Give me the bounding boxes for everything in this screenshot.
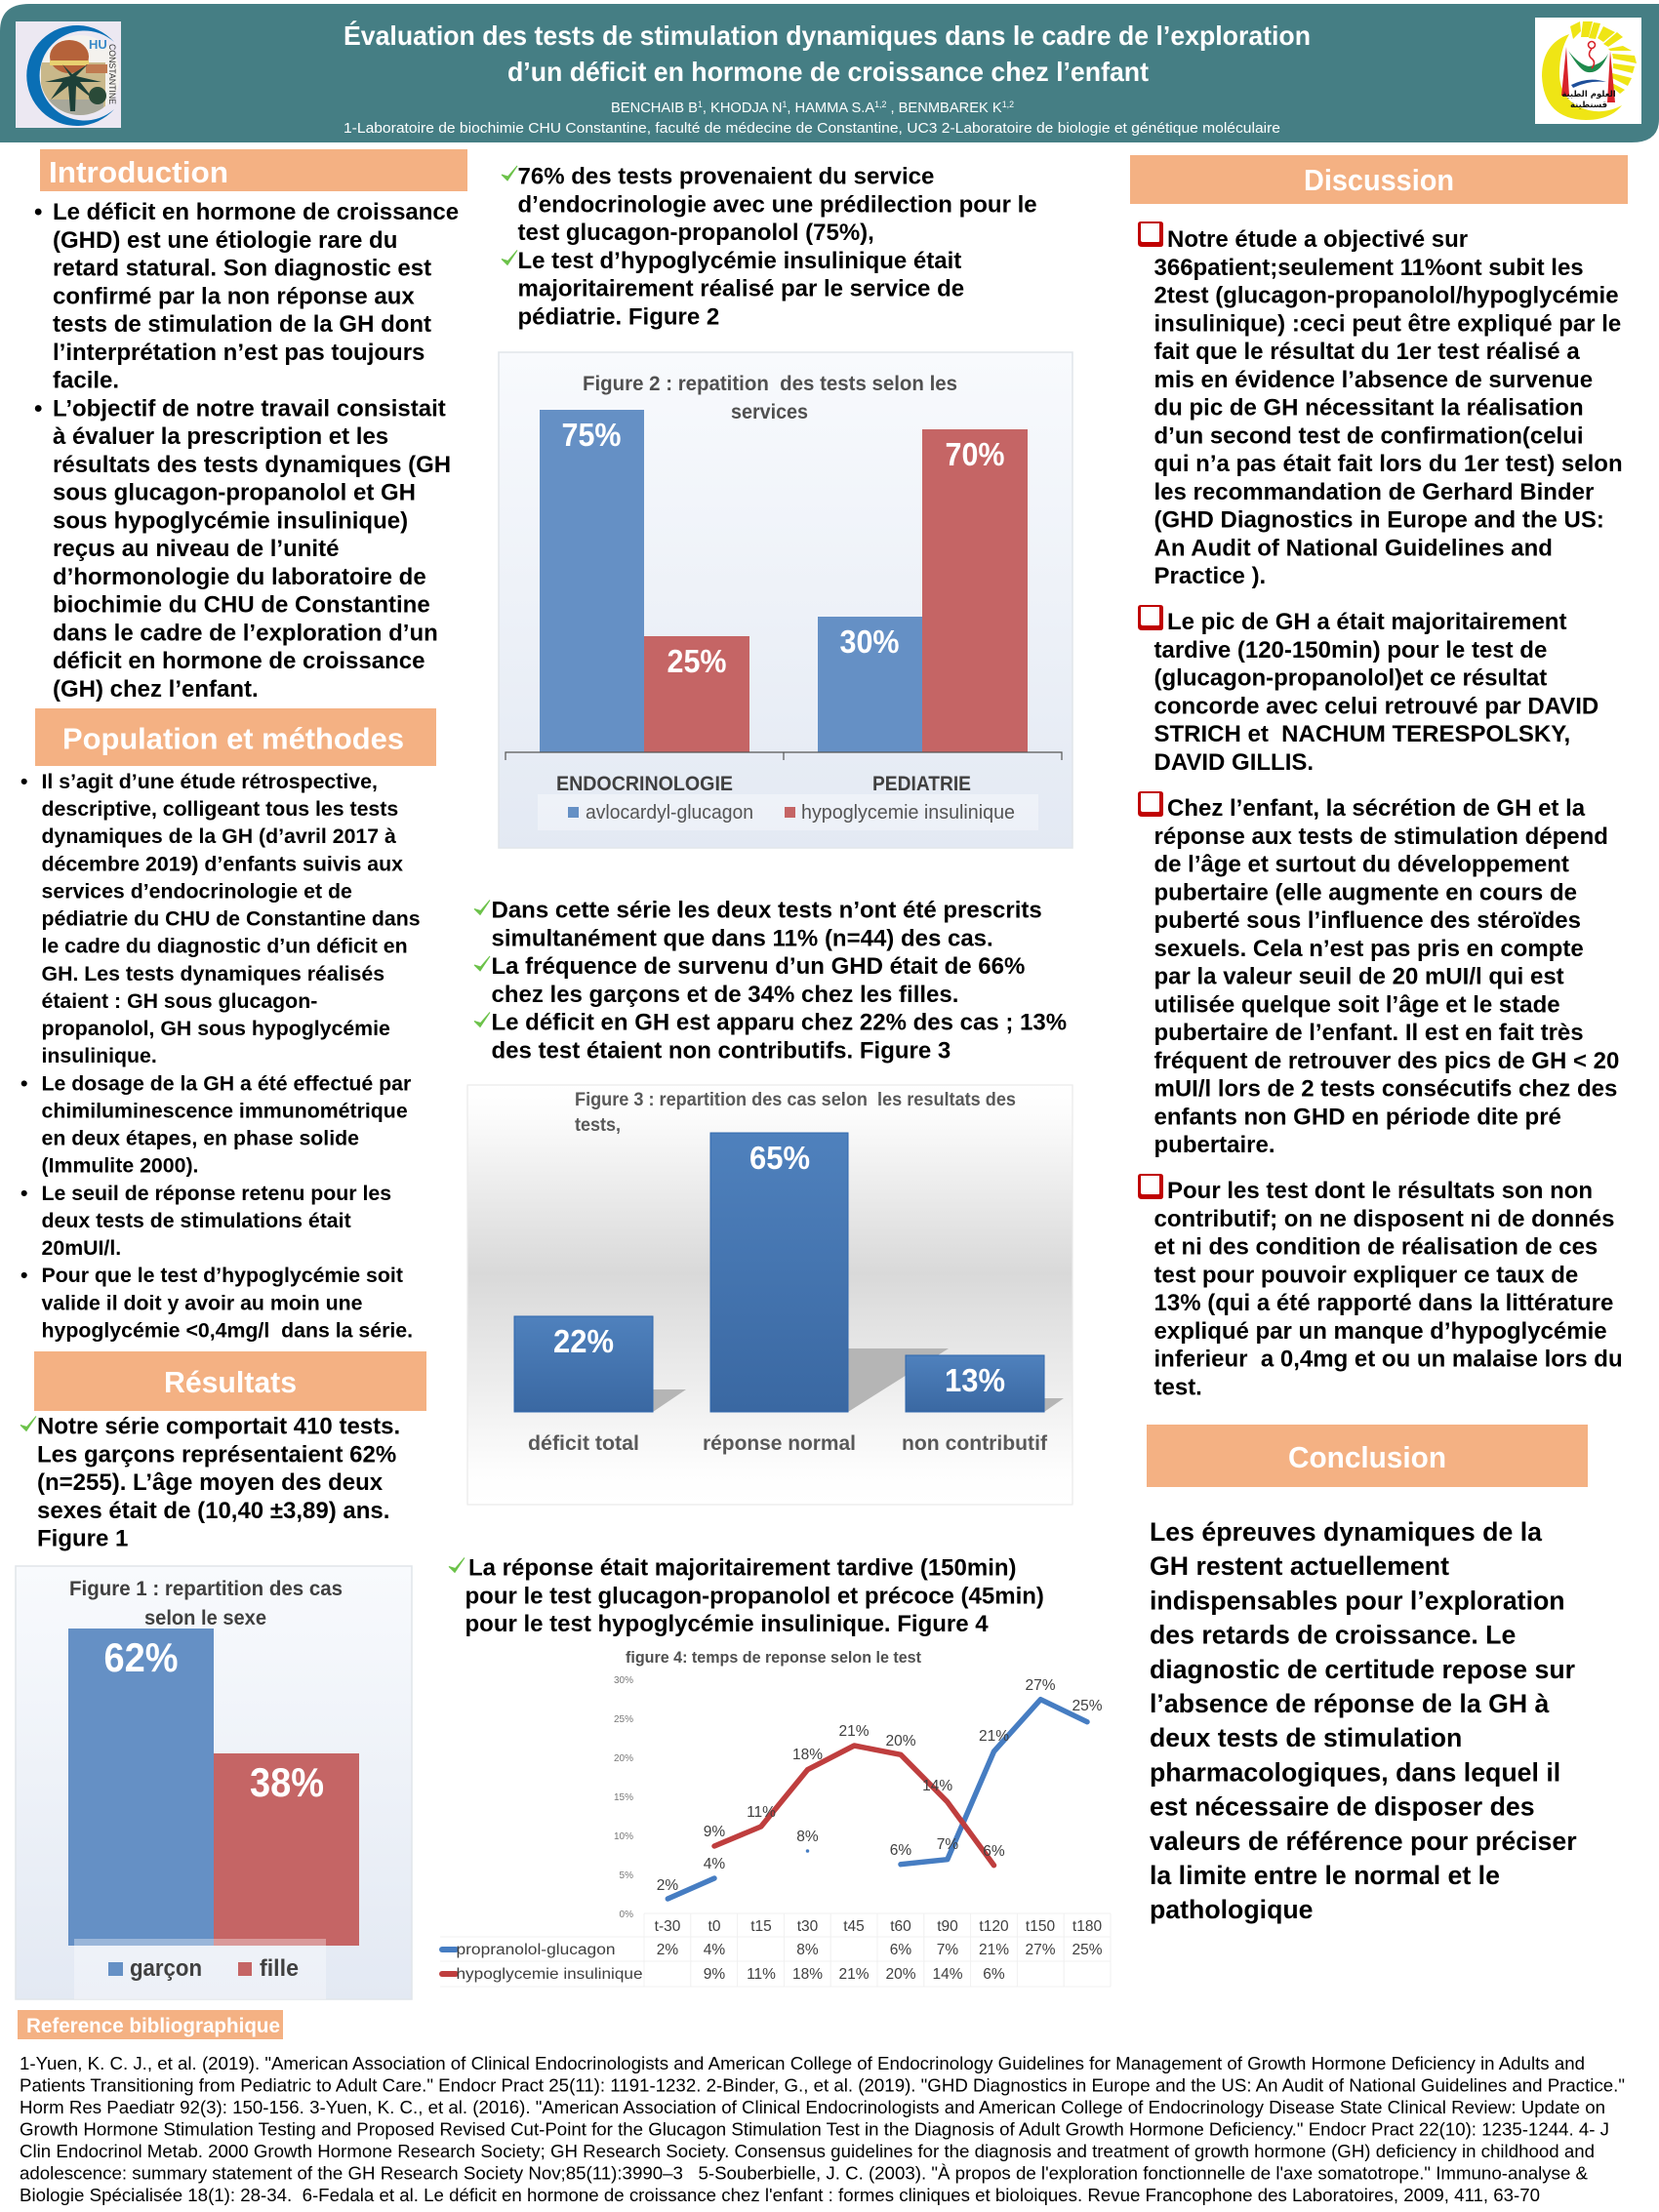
- affiliations: 1-Laboratoire de biochimie CHU Constantine, faculté de médecine de Constantine, UC3 2-Laboratoire de biologie et génétique moléculaire: [344, 120, 1280, 137]
- legend: [74, 1939, 326, 1999]
- chart: Figure 1: selon le sexe: [144, 1607, 266, 1629]
- methods text: (Immulite 2000).: [41, 1154, 198, 1178]
- discussion paragraph 3: [1138, 791, 1619, 1158]
- conclusion text: GH restent actuellement: [1150, 1551, 1449, 1581]
- table row: propranolol-glucagon: 2%: [657, 1942, 678, 1958]
- text: services: test glucagon-propanolol (75%),: [517, 220, 874, 246]
- table header: t-30: [655, 1918, 681, 1935]
- table row: hypoglycemie insulinique: 20%: [885, 1966, 916, 1983]
- category labels: réponse normal: [703, 1432, 856, 1455]
- table row: propranolol-glucagon: 6%: [890, 1942, 911, 1958]
- table header: t45: [843, 1918, 865, 1935]
- data labels: 11%: [747, 1804, 776, 1821]
- chart: Figure 2: [499, 352, 1072, 848]
- bar: pediatrie 30%: [818, 617, 922, 752]
- line: hypoglycemie insulinique: [714, 1746, 993, 1866]
- y axis labels: 15%: [614, 1792, 633, 1803]
- discussion paragraph 4: Pour les test dont le résultats son non: [1167, 1178, 1593, 1204]
- text: series: simultanément que dans 11% (n=44) des cas.: [492, 925, 993, 951]
- discussion paragraph 1: insulinique) :ceci peut être expliqué par le: [1153, 310, 1621, 337]
- discussion paragraph 4: et ni des condition de réalisation de ces: [1153, 1233, 1598, 1261]
- text: services: majoritairement réalisé par le service de: [517, 275, 964, 302]
- table row: propranolol-glucagon: 25%: [1072, 1942, 1103, 1958]
- references text: [20, 2053, 1625, 2205]
- data labels: 7%: [937, 1836, 958, 1853]
- references text: Biologie Spécialisée 18(1): 28-34. 6-Fedala et al. Le déficit en hormone de croissance chez l'enfant : formes cliniques et bioloiques. Revue Francophone des Laboratoires, 2009, 411, 63-70: [20, 2185, 1540, 2205]
- introduction text: biochimie du CHU de Constantine: [53, 591, 430, 619]
- discussion paragraph 1: Notre étude a objectivé sur: [1167, 226, 1468, 253]
- heading: Population et méthodes: [35, 708, 436, 766]
- table row: propranolol-glucagon: 27%: [1025, 1942, 1056, 1958]
- authors: , KHODJA N: [703, 100, 782, 116]
- text: services: pédiatrie. Figure 2: [517, 303, 719, 330]
- logo: CHU Constantine: [16, 21, 127, 128]
- discussion paragraph 1: An Audit of National Guidelines and: [1153, 535, 1553, 561]
- results text: [20, 1413, 400, 1551]
- methods text: le cadre du diagnostic d’un déficit en: [41, 935, 408, 958]
- table row: hypoglycemie insulinique: hypoglycemie insulinique: [457, 1966, 642, 1983]
- bar: endocrinologie 25%: [644, 636, 749, 752]
- table header: t30: [797, 1918, 819, 1935]
- discussion paragraph 1: Practice ).: [1153, 563, 1266, 589]
- methods text: Le dosage de la GH a été effectué par: [41, 1071, 411, 1095]
- text: series: [474, 898, 1067, 1064]
- discussion paragraph 1: du pic de GH nécessitant la réalisation: [1153, 394, 1584, 422]
- results text: Notre série comportait 410 tests.: [37, 1413, 400, 1440]
- discussion paragraph 3: pubertaire.: [1153, 1132, 1275, 1158]
- introduction text: dans le cadre de l’exploration d’un: [53, 620, 438, 646]
- introduction text: confirmé par la non réponse aux: [53, 283, 415, 309]
- table row: propranolol-glucagon: 7%: [937, 1942, 958, 1958]
- discussion paragraph 2: concorde avec celui retrouvé par DAVID: [1153, 693, 1598, 719]
- text: response timing: pour le test hypoglycémie insulinique. Figure 4: [465, 1611, 989, 1637]
- discussion paragraph 2: DAVID GILLIS.: [1153, 749, 1314, 776]
- methods text: •: [20, 770, 27, 793]
- discussion paragraph 4: [1138, 1174, 1623, 1400]
- references text: Clin Endocrinol Metab. 2000 Growth Hormone Research Society; GH Research Society. Consensus guidelines for the diagnosis and treatment of growth hormone (GH) deficiency in childhood and: [20, 2141, 1595, 2161]
- introduction text: d’hormonologie du laboratoire de: [53, 564, 426, 590]
- table header: t180: [1072, 1918, 1102, 1935]
- authors: 1: [698, 100, 703, 109]
- data labels: 25%: [1072, 1698, 1103, 1714]
- category labels: [556, 773, 971, 795]
- table row: propranolol-glucagon: 21%: [979, 1942, 1009, 1958]
- category labels: non contributif: [902, 1432, 1048, 1455]
- chart: Figure 3: Figure 3 : repartition des cas selon les resultats des: [575, 1089, 1016, 1110]
- references text: adolescence: summary statement of the GH Research Society Nov;85(11):3990–3 5-Souberbielle, J. C. (2003). "À propos de l'exploration fonctionnelle de l'axe somatotrope." Immuno-analyse &: [20, 2162, 1589, 2184]
- methods text: chimiluminescence immunométrique: [41, 1099, 408, 1122]
- icon: checkbox: [1138, 1174, 1163, 1199]
- conclusion text: des retards de croissance. Le: [1150, 1621, 1516, 1650]
- y axis labels: 20%: [614, 1753, 633, 1764]
- category labels: déficit total: [528, 1432, 639, 1455]
- discussion paragraph 3: de l’âge et surtout du développement: [1153, 851, 1569, 878]
- introduction text: résultats des tests dynamiques (GH: [53, 452, 451, 478]
- title: d’un déficit en hormone de croissance chez l’enfant: [507, 57, 1149, 87]
- conclusion text: indispensables pour l’exploration: [1150, 1586, 1565, 1615]
- conclusion text: l’absence de réponse de la GH à: [1150, 1689, 1550, 1718]
- table row: hypoglycemie insulinique: 14%: [932, 1966, 963, 1983]
- conclusion text: deux tests de stimulation: [1150, 1723, 1462, 1752]
- discussion paragraph 4: expliqué par un manque d’hypoglycémie: [1153, 1318, 1607, 1345]
- icon: checkbox: [1138, 791, 1163, 817]
- discussion paragraph 4: test pour pouvoir expliquer ce taux de: [1153, 1262, 1578, 1288]
- discussion paragraph 1: mis en évidence l’absence de survenue: [1153, 367, 1593, 393]
- data labels: 8%: [796, 1829, 819, 1845]
- methods text: valide il doit y avoir au moin une: [41, 1291, 363, 1314]
- discussion paragraph 1: qui n’a pas était fait lors du 1er test) selon: [1153, 451, 1623, 477]
- table row: hypoglycemie insulinique: 6%: [983, 1966, 1005, 1983]
- bar: endocrinologie 25%: 25%: [668, 643, 726, 679]
- y axis labels: [614, 1675, 633, 1920]
- discussion paragraph 1: 366patient;seulement 11%ont subit les: [1153, 255, 1584, 281]
- methods text: propanolol, GH sous hypoglycémie: [41, 1017, 390, 1040]
- legend: garçon: [130, 1955, 202, 1982]
- methods text: •: [20, 1264, 27, 1287]
- table row: propranolol-glucagon: propranolol-glucagon: [457, 1942, 615, 1958]
- bar: garçon 62%: [68, 1629, 214, 1946]
- results text: Les garçons représentaient 62%: [37, 1441, 396, 1468]
- methods text: décembre 2019) d’enfants suivis aux: [41, 852, 403, 875]
- table header: t90: [937, 1918, 958, 1935]
- introduction text: reçus au niveau de l’unité: [53, 536, 339, 562]
- y axis labels: 10%: [614, 1831, 633, 1842]
- bar: garçon 62%: 62%: [103, 1634, 178, 1680]
- table row: propranolol-glucagon: [442, 1942, 1103, 1958]
- category labels: PEDIATRIE: [872, 773, 971, 795]
- bar: déficit total 22%: [514, 1316, 653, 1412]
- category labels: [528, 1432, 1048, 1455]
- heading: Reference bibliographique: Reference bibliographique: [26, 2015, 280, 2037]
- methods text: Le seuil de réponse retenu pour les: [41, 1182, 391, 1205]
- text: services: d’endocrinologie avec une prédilection pour le: [517, 191, 1037, 218]
- logo: CHU Constantine: CONSTANTINE: [107, 44, 117, 104]
- results text: sexes était de (10,40 ±3,89) ans.: [37, 1498, 389, 1524]
- references text: Growth Hormone Stimulation Testing and Proposed Revised Cut-Point for the Glucagon Stimulation Test in the Diagnosis of Adult Growth Hormone Deficiency." Endocr Pract 22(10): 1235-1244. 4- J: [20, 2119, 1609, 2139]
- heading: Conclusion: [1147, 1425, 1588, 1487]
- methods text: •: [20, 1182, 27, 1205]
- bar: pediatrie 30%: 30%: [839, 623, 900, 660]
- heading: Résultats: Résultats: [164, 1365, 297, 1399]
- data labels: 20%: [885, 1733, 916, 1749]
- references text: Patients Transitioning from Pediatric to Adult Care." Endocr Pract 25(11): 1191-1232. 2-Binder, G., et al. (2019). "GHD Diagnostics in Europe and the US: An Audit of National Guidelines and Practice.": [20, 2074, 1625, 2096]
- bar: fille 38%: 38%: [250, 1759, 324, 1805]
- discussion paragraph 3: Chez l’enfant, la sécrétion de GH et la: [1167, 795, 1586, 822]
- legend: avlocardyl-glucagon: [586, 802, 753, 824]
- chart: Figure 2: services: [731, 401, 808, 423]
- text: series: Dans cette série les deux tests n’ont été prescrits: [492, 898, 1042, 923]
- data labels: 9%: [704, 1824, 725, 1840]
- introduction text: (GHD) est une étiologie rare du: [53, 227, 397, 254]
- data labels: 27%: [1025, 1677, 1056, 1694]
- logo: CHU Constantine: HU: [89, 37, 107, 52]
- bar: réponse normal 65%: [710, 1133, 848, 1412]
- heading: Discussion: Discussion: [1304, 163, 1454, 197]
- references text: 1-Yuen, K. C. J., et al. (2019). "American Association of Clinical Endocrinologists and American College of Endocrinology Guidelines for Management of Growth Hormone Deficiency in Adults and: [20, 2053, 1585, 2073]
- introduction text: déficit en hormone de croissance: [53, 648, 425, 674]
- introduction text: •: [34, 199, 42, 225]
- heading: Conclusion: Conclusion: [1288, 1440, 1446, 1474]
- text: series: des test étaient non contributifs. Figure 3: [492, 1037, 951, 1064]
- introduction text: [34, 199, 459, 703]
- methods text: dynamiques de la GH (d’avril 2017 à: [41, 824, 396, 848]
- icon: checkbox: [1138, 221, 1163, 247]
- table row: hypoglycemie insulinique: 18%: [792, 1966, 823, 1983]
- table row: hypoglycemie insulinique: 21%: [838, 1966, 870, 1983]
- authors: BENCHAIB B: [611, 100, 700, 116]
- chart: Figure 1: [16, 1566, 412, 1999]
- table header: t0: [708, 1918, 721, 1935]
- icon: checkbox: [1138, 605, 1163, 630]
- introduction text: facile.: [53, 367, 119, 394]
- y axis labels: 0%: [620, 1910, 633, 1920]
- table header: t120: [979, 1918, 1009, 1935]
- text: response timing: La réponse était majoritairement tardive (150min): [468, 1555, 1017, 1581]
- results text: Figure 1: [37, 1526, 128, 1551]
- introduction text: Le déficit en hormone de croissance: [53, 199, 459, 225]
- discussion paragraph 3: sexuels. Cela n’est pas pris en compte: [1153, 936, 1584, 962]
- references text: Horm Res Paediatr 92(3): 150-156. 3-Yuen, K. C., et al. (2016). "American Association of Clinical Endocrinologists and American College of Endocrinology Disease State Clinical Review: Update on: [20, 2097, 1605, 2117]
- conclusion text: valeurs de référence pour préciser: [1150, 1827, 1577, 1856]
- bar: endocrinologie 75%: [540, 410, 644, 752]
- discussion paragraph 3: puberté sous l’influence des stéroïdes: [1153, 907, 1581, 934]
- methods text: descriptive, colligeant tous les tests: [41, 797, 398, 821]
- discussion paragraph 2: tardive (120-150min) pour le test de: [1153, 637, 1547, 664]
- discussion paragraph 1: [1138, 221, 1623, 589]
- authors: 1: [782, 100, 787, 109]
- text: services: 76% des tests provenaient du service: [517, 164, 934, 189]
- discussion paragraph 1: d’un second test de confirmation(celui: [1153, 422, 1584, 449]
- text: response timing: [449, 1555, 1044, 1637]
- methods text: deux tests de stimulations était: [41, 1209, 351, 1232]
- methods text: hypoglycémie <0,4mg/l dans la série.: [41, 1318, 413, 1342]
- legend: fille: [260, 1955, 299, 1982]
- table row: hypoglycemie insulinique: 11%: [747, 1966, 776, 1983]
- methods text: en deux étapes, en phase solide: [41, 1127, 359, 1150]
- discussion paragraph 4: inferieur a 0,4mg et ou un malaise lors du: [1153, 1347, 1623, 1372]
- introduction text: •: [34, 395, 42, 422]
- title: Évaluation des tests de stimulation dynamiques dans le cadre de l’exploration: [344, 20, 1311, 51]
- methods text: [20, 770, 421, 1342]
- authors: 1,2: [874, 100, 886, 109]
- legend: [538, 794, 1038, 830]
- table header: t15: [750, 1918, 772, 1935]
- data labels: 21%: [838, 1723, 870, 1740]
- heading: Introduction: [40, 149, 467, 191]
- discussion paragraph 3: mUI/l lors de 2 tests consécutifs chez des: [1153, 1075, 1617, 1103]
- data labels: 6%: [890, 1842, 911, 1859]
- introduction text: (GH) chez l’enfant.: [53, 676, 259, 703]
- authors: 1,2: [1002, 100, 1014, 109]
- data labels: 6%: [983, 1843, 1005, 1860]
- logo: medical sciences: قسنطينة: [1570, 101, 1607, 110]
- discussion paragraph 3: réponse aux tests de stimulation dépend: [1153, 824, 1608, 850]
- bar: non contributif 13%: 13%: [945, 1362, 1005, 1398]
- logo: medical sciences: العلوم الطبية: [1561, 90, 1616, 100]
- text: response timing: pour le test glucagon-propanolol et précoce (45min): [465, 1583, 1044, 1609]
- text: series: chez les garçons et de 34% chez les filles.: [492, 982, 958, 1008]
- discussion paragraph 1: les recommandation de Gerhard Binder: [1153, 479, 1594, 505]
- table header: t150: [1026, 1918, 1055, 1935]
- text: services: [502, 164, 1037, 330]
- header banner: [0, 4, 1659, 142]
- chart: Figure 3: [467, 1085, 1072, 1505]
- discussion paragraph 3: pubertaire (elle augmente en cours de: [1153, 879, 1577, 905]
- introduction text: sous glucagon-propanolol et GH: [53, 480, 416, 505]
- discussion paragraph 1: fait que le résultat du 1er test réalisé a: [1153, 339, 1580, 365]
- heading: Introduction: Introduction: [49, 155, 228, 189]
- introduction text: à évaluer la prescription et les: [53, 423, 388, 450]
- methods text: services d’endocrinologie et de: [41, 879, 352, 903]
- bar: fille 38%: [214, 1753, 359, 1946]
- chart: Figure 4: [440, 1648, 1111, 1987]
- methods text: 20mUI/l.: [41, 1236, 121, 1260]
- methods text: GH. Les tests dynamiques réalisés: [41, 962, 384, 985]
- data labels: [657, 1677, 1103, 1894]
- discussion paragraph 3: par la valeur seuil de 20 mUI/l qui est: [1153, 964, 1564, 989]
- conclusion text: Les épreuves dynamiques de la: [1150, 1517, 1543, 1547]
- bar: pediatrie 70%: 70%: [945, 436, 1005, 472]
- data labels: 14%: [922, 1778, 952, 1794]
- discussion paragraph 2: STRICH et NACHUM TERESPOLSKY,: [1153, 721, 1570, 747]
- results text: (n=255). L’âge moyen des deux: [37, 1469, 384, 1496]
- authors: , BENMBAREK K: [886, 100, 1002, 116]
- category labels: ENDOCRINOLOGIE: [556, 773, 733, 795]
- discussion paragraph 3: enfants non GHD en période dite pré: [1153, 1104, 1561, 1130]
- conclusion text: pharmacologiques, dans lequel il: [1150, 1757, 1560, 1787]
- data labels: 4%: [704, 1856, 725, 1872]
- text: services: Le test d’hypoglycémie insulinique était: [517, 248, 961, 274]
- discussion paragraph 4: contributif; on ne disposent ni de donnés: [1153, 1206, 1614, 1232]
- introduction text: L’objectif de notre travail consistait: [53, 395, 446, 422]
- heading: Résultats: [34, 1351, 426, 1411]
- data labels: 18%: [792, 1747, 823, 1763]
- chart: Figure 2: Figure 2 : repatition des tests selon les: [583, 373, 957, 395]
- table row: propranolol-glucagon: 8%: [796, 1942, 819, 1958]
- discussion paragraph 2: Le pic de GH a était majoritairement: [1167, 609, 1566, 635]
- conclusion text: la limite entre le normal et le: [1150, 1861, 1500, 1890]
- conclusion text: pathologique: [1150, 1895, 1314, 1924]
- conclusion text: diagnostic de certitude repose sur: [1150, 1655, 1575, 1684]
- methods text: Il s’agit d’une étude rétrospective,: [41, 770, 378, 793]
- discussion paragraph 2: (glucagon-propanolol)et ce résultat: [1153, 665, 1547, 691]
- discussion paragraph 4: 13% (qui a été rapporté dans la littérature: [1153, 1290, 1613, 1316]
- data labels: 21%: [979, 1728, 1009, 1745]
- introduction text: sous hypoglycémie insulinique): [53, 507, 408, 534]
- bar: endocrinologie 75%: 75%: [562, 417, 621, 453]
- discussion paragraph 4: test.: [1153, 1374, 1202, 1400]
- heading: Discussion: [1130, 155, 1628, 204]
- y axis labels: 30%: [614, 1675, 633, 1686]
- table row: hypoglycemie insulinique: [442, 1966, 1005, 1983]
- bar: déficit total 22%: 22%: [553, 1323, 614, 1359]
- introduction text: retard statural. Son diagnostic est: [53, 256, 431, 281]
- bar: réponse normal 65%: 65%: [749, 1140, 810, 1176]
- bar: pediatrie 70%: [922, 429, 1028, 752]
- title: [344, 20, 1311, 87]
- table row: hypoglycemie insulinique: 9%: [704, 1966, 725, 1983]
- methods text: •: [20, 1071, 27, 1095]
- legend: hypoglycemie insulinique: [801, 802, 1015, 824]
- introduction text: tests de stimulation de la GH dont: [53, 311, 431, 338]
- y axis labels: 5%: [620, 1870, 633, 1881]
- data labels: 2%: [657, 1877, 678, 1894]
- methods text: insulinique.: [41, 1044, 157, 1067]
- introduction text: l’interprétation n’est pas toujours: [53, 340, 425, 366]
- methods text: étaient : GH sous glucagon-: [41, 989, 317, 1013]
- table header: t60: [890, 1918, 911, 1935]
- methods text: pédiatrie du CHU de Constantine dans: [41, 907, 421, 931]
- table row: propranolol-glucagon: 4%: [704, 1942, 725, 1958]
- logo: medical sciences: [1535, 18, 1641, 124]
- methods text: Pour que le test d’hypoglycémie soit: [41, 1264, 403, 1287]
- chart: Figure 4: figure 4: temps de reponse selon le test: [626, 1648, 921, 1667]
- bar: non contributif 13%: [906, 1355, 1044, 1412]
- authors: , HAMMA S.A: [787, 100, 874, 116]
- discussion paragraph 3: fréquent de retrouver des pics de GH < 20: [1153, 1048, 1619, 1074]
- chart: Figure 3: tests,: [575, 1114, 621, 1136]
- discussion paragraph 1: (GHD Diagnostics in Europe and the US:: [1153, 507, 1604, 533]
- chart: Figure 1: Figure 1 : repartition des cas: [69, 1578, 343, 1600]
- discussion paragraph 1: 2test (glucagon-propanolol/hypoglycémie: [1153, 283, 1619, 308]
- y axis labels: 25%: [614, 1714, 633, 1725]
- discussion paragraph 3: pubertaire de l’enfant. Il est en fait très: [1153, 1020, 1584, 1046]
- line: propranolol-glucagon: [668, 1700, 1087, 1899]
- text: series: Le déficit en GH est apparu chez 22% des cas ; 13%: [492, 1009, 1067, 1036]
- discussion paragraph 3: utilisée quelque soit l’âge et le stade: [1153, 991, 1560, 1018]
- discussion paragraph 2: [1138, 605, 1598, 776]
- table header: [655, 1918, 1102, 1935]
- text: series: La fréquence de survenu d’un GHD était de 66%: [492, 953, 1025, 980]
- data table grid: [440, 1913, 1111, 1987]
- conclusion text: est nécessaire de disposer des: [1150, 1792, 1535, 1822]
- heading: Population et méthodes: Population et méthodes: [62, 722, 404, 755]
